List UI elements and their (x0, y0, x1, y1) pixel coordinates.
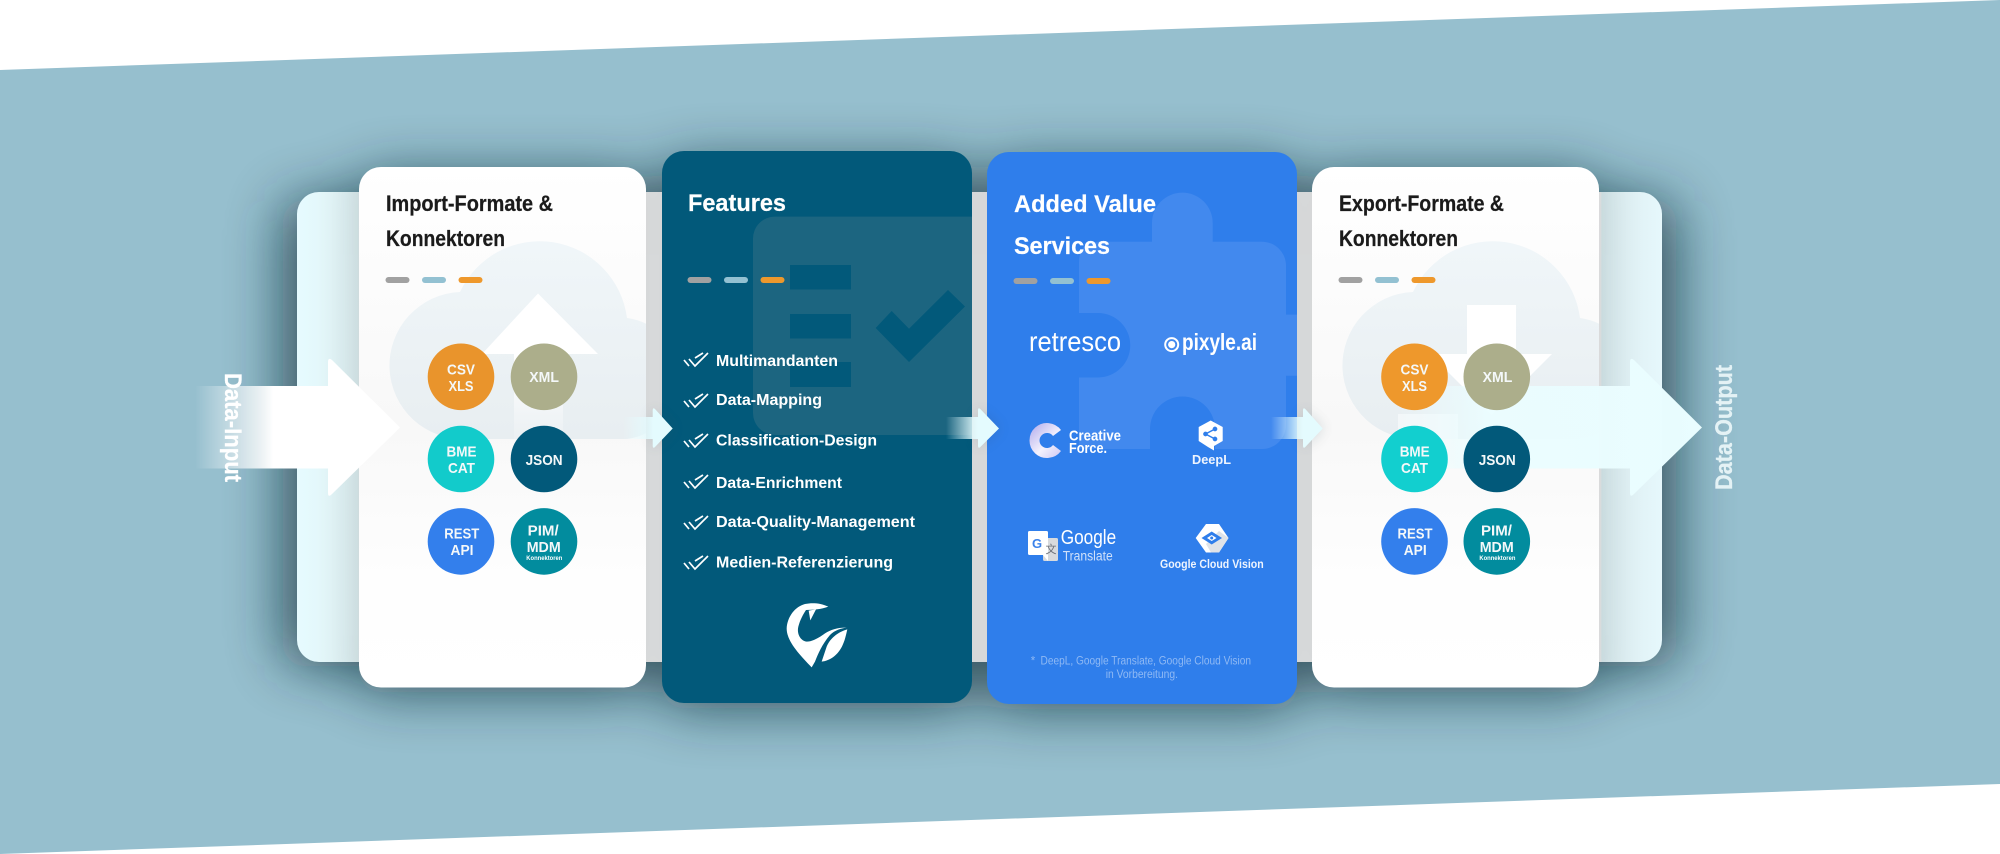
feature list: Data-Mapping (716, 392, 822, 409)
badge: export REST API: REST (1398, 525, 1432, 542)
badge: REST API (428, 508, 494, 575)
logo: Google Translate: Google (1061, 527, 1116, 549)
arrow: import to features (623, 408, 673, 448)
accent bars: import (386, 277, 482, 283)
badge: export PIM MDM: Konnektoren (1479, 556, 1516, 562)
label: Data-Output: Data-Output (1711, 365, 1738, 490)
badge: export JSON (1464, 426, 1530, 492)
icon: whale logo (787, 603, 847, 667)
heading: export (1339, 191, 1504, 251)
logo: Creative Force: Creative (1069, 427, 1121, 444)
logo: retresco: retresco (1029, 326, 1121, 357)
badge: export BME CAT: CAT (1401, 460, 1428, 477)
badge: PIM MDM: MDM (527, 539, 561, 556)
badge: export REST API: API (1404, 542, 1427, 559)
panel: export formats (1312, 167, 1599, 688)
heading: import: Konnektoren (386, 226, 505, 251)
badge: BME CAT (428, 426, 494, 492)
back panel (297, 192, 1662, 662)
badge: export PIM MDM: MDM (1480, 539, 1514, 556)
shadow behind panels (283, 164, 1676, 709)
heading: import (386, 191, 553, 251)
badge: export JSON: JSON (1479, 452, 1516, 469)
heading: added value: Added Value (1014, 191, 1156, 218)
logo: Google Translate: G (1032, 536, 1042, 551)
heading: added value: Services (1014, 233, 1110, 260)
badge: export REST API (1381, 508, 1448, 575)
logo: Google Cloud Vision (1160, 524, 1264, 571)
label: Data-Input: Data-Input (219, 373, 246, 482)
heading: export: Konnektoren (1339, 226, 1458, 251)
badge: CSV XLS: XLS (448, 378, 474, 395)
format badges: import (428, 344, 577, 575)
icon: puzzle watermark (1079, 193, 1310, 449)
icon: checklist watermark (753, 216, 972, 435)
footnote: DeepL, Google Translate, Google Cloud Vision (1040, 656, 1251, 668)
badge: export PIM MDM (1464, 508, 1530, 575)
logo: DeepL: DeepL (1192, 452, 1231, 467)
heading: export: Export-Formate & (1339, 191, 1504, 216)
format badges: export (1381, 344, 1530, 575)
badge: CSV XLS: CSV (447, 362, 475, 378)
accent bars: export (1338, 277, 1436, 283)
accent bars: features (688, 277, 784, 283)
badge: XML: XML (529, 369, 559, 386)
feature list: Classification-Design (716, 433, 877, 450)
logo: Google Translate: Translate (1063, 549, 1113, 564)
panel: added value services (987, 152, 1310, 704)
logo: Google Translate: 文 (1046, 542, 1056, 556)
heading: added value (1014, 191, 1156, 260)
footnote: in Vorbereitung. (1106, 669, 1178, 681)
badge: export PIM MDM: PIM/ (1481, 522, 1513, 540)
feature list: Multimandanten (716, 353, 838, 370)
badge: REST API: REST (444, 525, 479, 542)
badge: CSV XLS (428, 344, 494, 410)
icon: download cloud (1342, 242, 1599, 434)
logo: DeepL (1192, 420, 1231, 467)
footnote: * (1031, 656, 1036, 668)
feature list (684, 353, 915, 572)
arrow: data input (195, 359, 400, 496)
badge: JSON (511, 426, 577, 492)
badge: BME CAT: BME (446, 443, 476, 460)
feature list: Data-Quality-Management (716, 514, 915, 531)
panel: features (662, 151, 972, 703)
badge: export BME CAT (1381, 426, 1448, 492)
panel: import formats (359, 167, 646, 688)
badge: export XML (1464, 344, 1530, 410)
heading: import: Import-Formate & (386, 191, 553, 216)
logo: Creative Force (1034, 427, 1121, 457)
heading: features: Features (688, 190, 786, 217)
feature list: Data-Enrichment (716, 475, 842, 492)
badge: XML (511, 344, 577, 410)
logo: Google Cloud Vision: Google Cloud Vision (1160, 557, 1264, 571)
logo: pixyle.ai (1165, 329, 1257, 355)
badge: BME CAT: CAT (448, 460, 475, 477)
arrow: added value to export (1271, 408, 1323, 448)
accent bars: added value (1014, 278, 1110, 284)
badge: export CSV XLS: CSV (1400, 362, 1428, 378)
badge: export CSV XLS (1381, 344, 1448, 410)
badge: export BME CAT: BME (1400, 443, 1430, 460)
feature list: Medien-Referenzierung (716, 555, 893, 572)
arrow: features to added value (946, 408, 999, 448)
icon: upload cloud (390, 242, 646, 439)
card shadows on back panel (355, 192, 1603, 662)
footnote (1031, 656, 1251, 681)
badge: export CSV XLS: XLS (1402, 378, 1427, 395)
badge: export XML: XML (1483, 369, 1512, 386)
badge: PIM MDM (511, 508, 577, 575)
arrow: data output (1398, 359, 1702, 496)
logo: Creative Force: Force. (1069, 440, 1107, 457)
badge: JSON: JSON (526, 452, 563, 469)
logo: pixyle.ai: pixyle.ai (1182, 329, 1257, 355)
badge: REST API: API (450, 542, 474, 559)
logo: Google Translate (1028, 527, 1116, 564)
badge: PIM MDM: Konnektoren (526, 556, 563, 562)
badge: PIM MDM: PIM/ (528, 522, 560, 540)
